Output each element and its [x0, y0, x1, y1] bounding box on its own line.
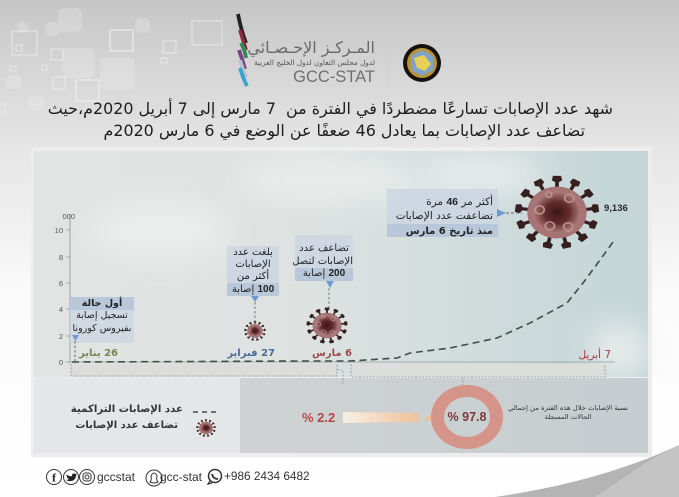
callout text: 46 times: منذ تاريخ 6 مارس — [406, 226, 493, 237]
bracket connectors — [337, 370, 463, 386]
logo title arabic: المـركـز الإحـصـائي — [247, 38, 375, 57]
y axis: 10 — [55, 226, 63, 235]
chart background — [34, 151, 648, 377]
callout text: 200 cases — [292, 243, 353, 279]
share description — [508, 404, 628, 421]
value 2.2 percent: % 2.2 — [302, 410, 335, 425]
callout text: 100 cases: بلغت عدد — [233, 247, 273, 258]
date label: 26 January: 26 يناير — [79, 348, 118, 359]
icon: GCC emblem — [403, 44, 441, 82]
panel frame — [31, 147, 652, 457]
icon: medium virus — [306, 307, 348, 344]
page background and chart artwork: f — [52, 470, 57, 484]
y axis: 6 — [59, 279, 63, 288]
callout text: 200 cases: الإصابات لتصل — [292, 256, 353, 266]
date label: 27 February: 27 فبراير — [227, 348, 275, 359]
logo subtitle arabic: لدول مجلس التعاون لدول الخليج العربية — [254, 58, 375, 67]
icon: GCC-STAT ribbon logo — [238, 14, 247, 86]
icon: legend virus — [196, 419, 216, 437]
date label: 6 March: 6 مارس — [312, 348, 352, 359]
y axis: 8 — [59, 253, 63, 262]
comparison panel background — [240, 378, 648, 453]
legend label: cumulative cases: عدد الإصابات التراكمية — [71, 404, 183, 415]
icon: large virus — [515, 176, 599, 249]
callout text: 100 cases: أكثر من — [237, 271, 269, 282]
legend dashes — [193, 411, 220, 413]
title line 2: تضاعف عدد الإصابات بما يعادل 46 ضعفًا عن الوضع في 6 مارس 2020م — [104, 121, 585, 140]
footer phone: +986 2434 6482 — [224, 469, 310, 483]
y axis: 4 — [59, 305, 63, 314]
period bracket 2 — [351, 364, 605, 377]
footer handle gcc-stat: gcc-stat — [160, 470, 202, 484]
emblem divider — [387, 44, 389, 86]
period bracket 1 — [71, 364, 337, 376]
2.2 percent bar — [343, 412, 440, 423]
footer icons — [46, 470, 222, 486]
corner swoosh — [495, 445, 679, 497]
y axis: 0 — [59, 358, 63, 367]
y axis: 000 — [62, 212, 75, 221]
legend panel background — [34, 378, 240, 453]
icon: twitter bird — [66, 474, 77, 481]
callout text: 200 cases: تضاعف عدد — [299, 243, 349, 254]
cumulative cases dashed line — [72, 242, 613, 362]
callout text: first case: بفيروس كورونا — [73, 323, 131, 334]
decorative squares — [0, 21, 222, 114]
title line 1: شهد عدد الإصابات تسارعًا مضطردًا في الفترة من 7 مارس إلى 7 أبريل 2020م،حيث — [48, 99, 613, 118]
callout text: 46 times: تضاعفت عدد الإصابات — [396, 210, 493, 222]
callout box: first case — [70, 297, 134, 362]
share description: نسبة الإصابات خلال هذه الفترة من إجمالي — [508, 404, 628, 412]
callout text: first case: أول حالة — [82, 298, 122, 309]
callout text: 46 times: أكثر مر 46 مرة — [426, 196, 493, 208]
y axis — [55, 212, 615, 367]
callout box: 100 cases — [227, 246, 279, 321]
callout text: 100 cases: الإصابات — [235, 259, 271, 270]
donut chart 97.8 percent — [431, 385, 503, 449]
legend label: case doubling: تضاعف عدد الإصابات — [75, 420, 178, 431]
callout box: 46 times — [387, 189, 522, 237]
date label: 7 April: 7 أبريل — [578, 349, 611, 361]
value 97.8 percent: % 97.8 — [448, 410, 486, 424]
callout box: 200 cases — [295, 235, 353, 308]
logo GCC-STAT: GCC-STAT — [293, 68, 375, 86]
icon: small virus — [244, 321, 266, 341]
callout text: first case — [73, 296, 131, 334]
callout text: 100 cases: 100 إصابة — [232, 284, 274, 295]
y axis: 2 — [59, 332, 63, 341]
footer handle gccstat: gccstat — [97, 470, 135, 484]
callout text: 46 times — [396, 194, 493, 237]
value label 9,136: 9,136 — [604, 203, 628, 214]
callout text: 200 cases: 200 إصابة — [303, 268, 345, 279]
callout text: first case: تسجيل إصابة — [76, 310, 128, 321]
callout text: 100 cases — [232, 247, 274, 295]
share description: الحالات المسجلة — [544, 413, 592, 421]
